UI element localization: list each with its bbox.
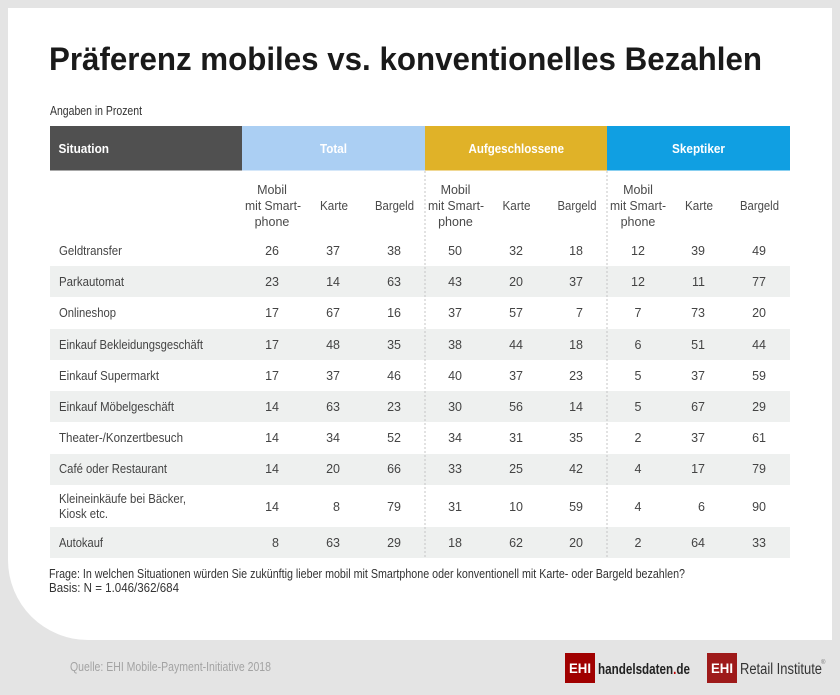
row: Kleineinkäufe bei Bäcker, Kiosk etc.: 14 [265,500,279,514]
row: Geldtransfer: 18 [569,244,583,258]
row: Einkauf Bekleidungsgeschäft: 18 [569,338,583,352]
row: Onlineshop: 7 [576,306,583,320]
row: Café oder Restaurant: 33 [448,462,462,476]
row: Theater-/Konzertbesuch: 34 [326,431,340,445]
headings: Skeptiker: mit Smart- [610,199,666,213]
row: Einkauf Möbelgeschäft [59,399,766,414]
row: Onlineshop: 57 [509,306,523,320]
row: Parkautomat: 11 [692,275,705,289]
row: Autokauf: 62 [509,536,523,550]
row: Onlineshop: 16 [387,306,401,320]
row: Café oder Restaurant: 42 [569,462,583,476]
row: Einkauf Möbelgeschäft: Einkauf Möbelgeschäft [59,399,174,414]
row: Geldtransfer: 38 [387,244,401,258]
row: Autokauf: 33 [752,536,766,550]
row: Theater-/Konzertbesuch: 52 [387,431,401,445]
logo: EHI Retail Institute [707,653,826,683]
row: Autokauf: 18 [448,536,462,550]
logo: EHI handelsdaten.de [565,653,690,683]
row: Einkauf Bekleidungsgeschäft: 35 [387,338,401,352]
row: Einkauf Möbelgeschäft: 29 [752,400,766,414]
headings: Skeptiker [610,183,779,229]
header: Total: Total [320,142,347,156]
row: Autokauf: 8 [272,536,279,550]
row: Autokauf: 29 [387,536,401,550]
source: Quelle: EHI Mobile-Payment-Initiative 2018 [70,660,271,674]
row: Einkauf Bekleidungsgeschäft [59,337,766,352]
logo: EHI Retail Institute: EHI [711,661,733,676]
row: Kleineinkäufe bei Bäcker, Kiosk etc.: 4 [635,500,642,514]
row: Geldtransfer: 49 [752,244,766,258]
row: Onlineshop: 37 [448,306,462,320]
row: Café oder Restaurant: Café oder Restaurant [59,461,167,476]
header: Situation [50,126,242,170]
row: Café oder Restaurant: 20 [326,462,340,476]
row: Café oder Restaurant [59,461,766,476]
row: Geldtransfer: 12 [631,244,645,258]
survey question and base: Frage: In welchen Situationen würden Sie zukünftig lieber mobil mit Smartphone oder konventionell mit Karte- oder Bargeld bezahlen? [49,567,685,581]
row: Parkautomat: Parkautomat [59,274,124,289]
headings: Aufgeschlossene: mit Smart- [428,199,484,213]
row: Einkauf Möbelgeschäft: 23 [387,400,401,414]
row: Einkauf Möbelgeschäft: 67 [691,400,705,414]
row: Einkauf Möbelgeschäft: 30 [448,400,462,414]
survey question and base: Basis: N = 1.046/362/684 [49,581,179,595]
row: Kleineinkäufe bei Bäcker, Kiosk etc.: Kleineinkäufe bei Bäcker, [59,491,186,506]
row: Theater-/Konzertbesuch [59,430,766,445]
row: Theater-/Konzertbesuch: 2 [635,431,642,445]
row: Theater-/Konzertbesuch: 31 [509,431,523,445]
logo: EHI Retail Institute: ® [821,659,826,666]
row: Einkauf Supermarkt: Einkauf Supermarkt [59,368,159,383]
row: Geldtransfer [59,243,766,258]
row: Café oder Restaurant: 4 [635,462,642,476]
row: Kleineinkäufe bei Bäcker, Kiosk etc.: Kiosk etc. [59,506,108,521]
row: Einkauf Möbelgeschäft: 5 [635,400,642,414]
row: Einkauf Bekleidungsgeschäft: 44 [752,338,766,352]
headings: Total [245,183,414,229]
headings: Skeptiker: Karte [685,199,713,213]
row: Autokauf [59,535,766,550]
headings: Skeptiker: Bargeld [740,199,779,213]
row: Einkauf Möbelgeschäft: 14 [265,400,279,414]
row: Einkauf Supermarkt: 46 [387,369,401,383]
header: Skeptiker: Skeptiker [672,142,725,156]
row: Einkauf Supermarkt: 59 [752,369,766,383]
row: Parkautomat: 20 [509,275,523,289]
row: Einkauf Bekleidungsgeschäft: 38 [448,338,462,352]
row: Einkauf Bekleidungsgeschäft: Einkauf Bekleidungsgeschäft [59,337,203,352]
logo: EHI Retail Institute: Retail Institute [740,661,822,678]
row: Theater-/Konzertbesuch: 34 [448,431,462,445]
row: Autokauf: 2 [635,536,642,550]
header: Situation: Situation [58,142,109,156]
row: Parkautomat: 12 [631,275,645,289]
headings: Skeptiker: phone [621,215,655,229]
row: Onlineshop: 67 [326,306,340,320]
row: Parkautomat [59,274,766,289]
headings: Aufgeschlossene: Karte [502,199,531,213]
row: Theater-/Konzertbesuch: 35 [569,431,583,445]
row: Geldtransfer: 32 [509,244,523,258]
row: Café oder Restaurant: 66 [387,462,401,476]
unit note: Angaben in Prozent [50,104,142,118]
row: Geldtransfer: Geldtransfer [59,243,123,258]
row: Café oder Restaurant: 14 [265,462,279,476]
row: Onlineshop: 17 [265,306,279,320]
row: Parkautomat: 37 [569,275,583,289]
row: Onlineshop: 20 [752,306,766,320]
column headings [245,183,779,229]
row: Parkautomat: 77 [752,275,766,289]
row: Einkauf Bekleidungsgeschäft: 17 [265,338,279,352]
row: Autokauf: 63 [326,536,340,550]
header: Aufgeschlossene: Aufgeschlossene [468,142,564,156]
row: Kleineinkäufe bei Bäcker, Kiosk etc.: 8 [333,500,340,514]
row: Café oder Restaurant: 17 [691,462,705,476]
row: Geldtransfer: 39 [691,244,705,258]
row: Café oder Restaurant: 25 [509,462,523,476]
row: Einkauf Möbelgeschäft: 14 [569,400,583,414]
row: Einkauf Supermarkt: 37 [691,369,705,383]
row: Einkauf Supermarkt: 17 [265,369,279,383]
headings: Total: phone [255,215,289,229]
row: Kleineinkäufe bei Bäcker, Kiosk etc.: 6 [698,500,705,514]
title: Präferenz mobiles vs. konventionelles Bezahlen [49,41,762,77]
row: Autokauf: 64 [691,536,705,550]
headings: Total: mit Smart- [245,199,301,213]
headings: Aufgeschlossene: phone [438,215,473,229]
headings: Aufgeschlossene: Mobil [441,183,470,197]
row: Geldtransfer: 26 [265,244,279,258]
row: Einkauf Supermarkt: 37 [509,369,523,383]
row: Theater-/Konzertbesuch: 61 [752,431,766,445]
row: Kleineinkäufe bei Bäcker, Kiosk etc. [59,491,766,521]
row: Einkauf Möbelgeschäft: 56 [509,400,523,414]
row: Onlineshop: 7 [635,306,642,320]
row: Parkautomat: 14 [326,275,340,289]
row: Autokauf: 20 [569,536,583,550]
headings: Aufgeschlossene: Bargeld [558,199,597,213]
row: Kleineinkäufe bei Bäcker, Kiosk etc.: 31 [448,500,462,514]
row: Einkauf Bekleidungsgeschäft: 48 [326,338,340,352]
row: Theater-/Konzertbesuch: 14 [265,431,279,445]
row: Einkauf Bekleidungsgeschäft: 6 [635,338,642,352]
headings: Total: Mobil [257,183,287,197]
row: Café oder Restaurant: 79 [752,462,766,476]
row: Einkauf Supermarkt: 5 [635,369,642,383]
row: Einkauf Supermarkt [59,368,766,383]
row: Kleineinkäufe bei Bäcker, Kiosk etc.: 90 [752,500,766,514]
row: Theater-/Konzertbesuch: 37 [691,431,705,445]
row stripes [50,266,790,558]
table header [50,126,790,170]
logo: EHI handelsdaten.de: handelsdaten.de [598,661,690,678]
headings: Total: Bargeld [375,199,414,213]
row: Geldtransfer: 37 [326,244,340,258]
row: Einkauf Bekleidungsgeschäft: 51 [691,338,705,352]
row: Einkauf Bekleidungsgeschäft: 44 [509,338,523,352]
row: Kleineinkäufe bei Bäcker, Kiosk etc.: 59 [569,500,583,514]
row: Kleineinkäufe bei Bäcker, Kiosk etc.: 10 [509,500,523,514]
row: Onlineshop [59,305,766,320]
row: Onlineshop: 73 [691,306,705,320]
row: Parkautomat: 63 [387,275,401,289]
survey question and base [49,567,685,595]
row: Onlineshop: Onlineshop [59,305,116,320]
headings: Total: Karte [320,199,348,213]
row: Einkauf Supermarkt: 23 [569,369,583,383]
header: Skeptiker [607,126,790,170]
row: Parkautomat: 23 [265,275,279,289]
row: Einkauf Supermarkt: 37 [326,369,340,383]
header: Total [242,126,425,170]
row: Geldtransfer: 50 [448,244,462,258]
logo: EHI handelsdaten.de: EHI [569,661,591,676]
row: Einkauf Supermarkt: 40 [448,369,462,383]
headings: Skeptiker: Mobil [623,183,653,197]
row: Theater-/Konzertbesuch: Theater-/Konzertbesuch [59,430,183,445]
headings: Aufgeschlossene [428,183,597,229]
row: Kleineinkäufe bei Bäcker, Kiosk etc.: 79 [387,500,401,514]
row: Einkauf Möbelgeschäft: 63 [326,400,340,414]
header: Aufgeschlossene [425,126,607,170]
row: Parkautomat: 43 [448,275,462,289]
row: Autokauf: Autokauf [59,535,103,550]
